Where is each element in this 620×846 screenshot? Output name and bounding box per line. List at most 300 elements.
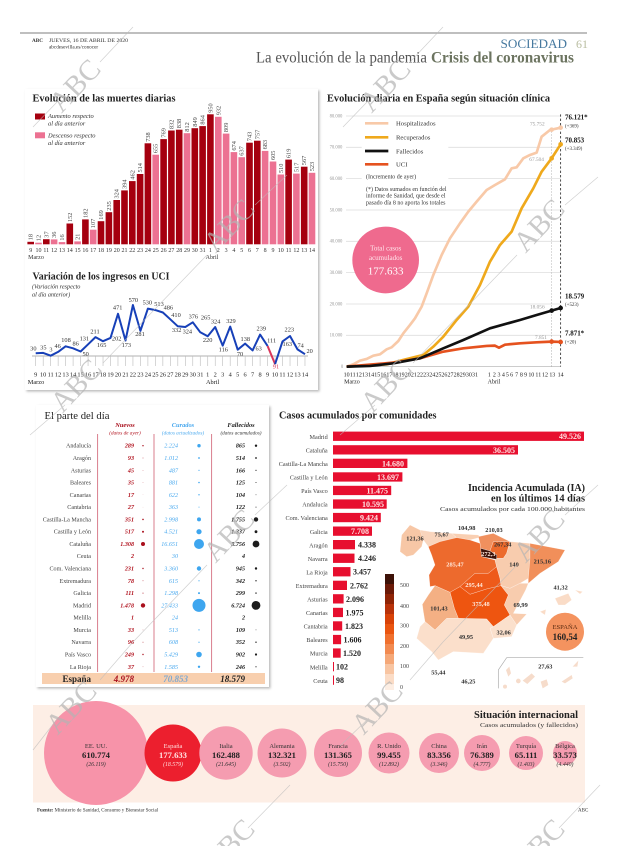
region names: Canarias	[70, 493, 92, 499]
legend: clinical situation: UCI	[396, 162, 407, 169]
panel: international situation	[33, 701, 585, 805]
line chart: ICU admissions: 410	[171, 312, 181, 319]
bar chart: daily deaths: 849	[192, 117, 199, 127]
x axis: dates of daily deaths: 3	[225, 248, 228, 254]
line chart: ICU admissions: 3	[49, 346, 53, 353]
column: deaths: 865	[236, 444, 245, 450]
masthead: ABC and date: JUEVES, 16 DE ABRIL DE 2020	[49, 38, 128, 44]
bubble: Italy	[199, 726, 253, 780]
heading: clinical situation: Evolución diaria en España según situación clínica	[327, 94, 551, 105]
panel: cases by community	[279, 410, 584, 685]
column: new cases: 289	[124, 444, 134, 450]
bar chart: cases by community: Extremadura	[296, 583, 328, 590]
column: recovered: 615	[169, 579, 178, 585]
region names: Baleares	[70, 480, 92, 486]
right-hand totals: (+523)	[565, 303, 579, 308]
bar chart: cases by community: Melilla	[310, 664, 328, 671]
column: recovered: 608	[169, 640, 178, 646]
x axis: dates of clinical chart: 9	[524, 373, 527, 379]
x axis: dates of daily deaths: 5	[240, 248, 243, 254]
bar chart: daily deaths: 18	[28, 234, 35, 240]
map value labels: 27,63	[538, 663, 552, 670]
legend: colour scale: 200	[400, 644, 409, 650]
axis values: 30.000	[330, 271, 343, 276]
bubble: UK	[368, 732, 410, 774]
x axis: dates of ICU admissions: 20	[115, 371, 121, 378]
x axis: dates of ICU admissions: 19	[107, 371, 114, 378]
column: new cases: 37	[127, 665, 135, 671]
x axis: dates of daily deaths: 10	[278, 248, 284, 254]
column: deaths: 3.756	[230, 542, 246, 548]
x axis: dates of daily deaths: 2	[217, 248, 220, 254]
line chart: ICU admissions: 281	[135, 331, 145, 338]
panel: daily deaths and ICU variation	[25, 89, 318, 390]
bar chart: daily deaths: 605	[270, 151, 277, 160]
bar chart: cases by community: 3.457	[353, 568, 371, 577]
bubble: Iran: 76.389	[470, 750, 494, 760]
callout: total cases: acumulados	[369, 254, 403, 262]
column: new cases: 45	[127, 468, 134, 474]
line chart: ICU admissions: 116	[219, 346, 228, 353]
column headers	[109, 422, 262, 436]
heading: international situation: Casos acumulados (y fallecidos)	[480, 722, 578, 729]
column: new cases: 78	[128, 579, 134, 585]
column: new cases: 1.478	[120, 603, 134, 609]
totals row: Spain: 4.978	[113, 674, 134, 684]
watermarks: ABC	[43, 53, 107, 119]
bubble: Italy: 162.488	[212, 750, 241, 760]
x axis: dates of ICU admissions: 12	[287, 371, 293, 378]
x axis: dates of daily deaths: 28	[176, 248, 182, 254]
bubble: France: (15.750)	[328, 761, 348, 768]
map value labels: 295,44	[465, 582, 484, 589]
header	[20, 33, 588, 67]
x axis: dates of ICU admissions: 9	[266, 371, 269, 378]
x axis: dates of daily deaths	[28, 248, 315, 261]
x axis: dates of clinical chart: 6	[510, 373, 513, 379]
legend: daily deaths: Descenso respecto	[47, 132, 96, 140]
column: recovered: 1.585	[164, 665, 178, 671]
axis values	[330, 114, 344, 370]
bar chart: daily deaths: 517	[293, 163, 300, 172]
column: new cases: 249	[124, 652, 134, 658]
map value labels: 41,32	[554, 584, 568, 591]
heading: incidence: Incidencia Acumulada (IA)	[468, 483, 585, 494]
x axis: dates of daily deaths: 16	[82, 248, 88, 254]
bar chart: cases by community: Galicia	[310, 529, 328, 536]
region names: Castilla y León	[54, 530, 91, 536]
bar chart: daily deaths: 235	[106, 201, 113, 211]
x axis: dates of clinical chart: 14	[368, 373, 374, 379]
line chart: ICU admissions: 223	[285, 326, 294, 333]
x axis: dates of clinical chart: 8	[520, 373, 523, 379]
x axis: dates of ICU admissions: 8	[258, 371, 262, 378]
x axis: dates of clinical chart: 3	[497, 373, 500, 379]
region names: Asturias	[71, 468, 92, 474]
bubble: USA: (26.119)	[86, 761, 106, 768]
bar chart: cases by community: 4.246	[358, 554, 376, 563]
legend: clinical situation: Recuperados	[396, 135, 431, 142]
map value labels: 267,34	[494, 542, 512, 549]
column: new cases: 231	[124, 566, 134, 572]
x axis: dates of daily deaths: 22	[129, 248, 135, 254]
column: recovered: 513	[169, 628, 178, 634]
line chart: ICU admissions	[28, 297, 313, 386]
x axis: dates of clinical chart: 24	[429, 373, 435, 379]
x axis: dates of ICU admissions: 13	[294, 371, 301, 378]
x axis: dates of clinical chart: 19	[399, 373, 405, 379]
x axis: dates of clinical chart: 16	[380, 373, 386, 379]
x axis: dates of ICU admissions: 10	[272, 371, 278, 378]
note: ICU admissions: al día anterior)	[32, 291, 70, 298]
column headers: Nuevos	[114, 422, 135, 429]
region names: País Vasco	[65, 652, 91, 658]
line chart: ICU admissions: 513	[154, 301, 164, 308]
line chart: ICU admissions: 35	[40, 344, 46, 351]
column: deaths: 246	[235, 665, 246, 671]
bar chart: cases by community: 36.505	[493, 446, 515, 455]
x axis: dates of clinical chart: 22	[417, 373, 423, 379]
grey previous-day values: 18.056	[530, 304, 545, 310]
bar chart: daily deaths: 738	[145, 132, 152, 142]
map value labels: 32,06	[497, 630, 511, 637]
totals row: Spain: 18.579	[220, 674, 246, 684]
bar chart: daily deaths: 864	[200, 114, 207, 125]
x axis: dates of ICU admissions: 24	[145, 371, 152, 378]
x axis: dates of ICU admissions: Abril	[206, 379, 220, 386]
x axis: dates of daily deaths: 19	[106, 248, 112, 254]
legend: colour scale: 300	[400, 624, 409, 630]
bar chart: daily deaths	[27, 103, 316, 261]
x axis: dates of ICU admissions: 14	[70, 371, 77, 378]
x axis: dates of daily deaths: 12	[293, 248, 299, 254]
bar chart: cases by community: 2.762	[350, 581, 368, 590]
bar chart: daily deaths: 12	[36, 235, 42, 241]
map value labels: 375,48	[472, 601, 490, 608]
bar chart: cases by community: 7.708	[351, 527, 369, 536]
line: deaths	[347, 308, 561, 367]
line chart: ICU admissions: 211	[90, 329, 100, 336]
legend: clinical situation: pasado día 8 no aporta los totales	[366, 200, 446, 206]
bar chart: cases by community: 1.975	[346, 608, 364, 617]
line chart: ICU admissions: 471	[113, 305, 122, 312]
column: new cases: 1.308	[120, 542, 134, 548]
bar chart: daily deaths: 757	[254, 130, 261, 139]
panel: cumulative incidence map	[385, 483, 585, 691]
region names: Aragón	[73, 456, 91, 462]
line: ICU	[347, 342, 561, 367]
source line: ABC	[578, 808, 589, 814]
region names: Cantabria	[67, 505, 91, 511]
x axis: dates of daily deaths: 31	[200, 248, 206, 254]
legend: colour scale	[385, 574, 409, 691]
x axis: dates of ICU admissions: 25	[152, 371, 159, 378]
column: new cases: 111	[126, 591, 134, 597]
column: recovered: 1.012	[164, 456, 178, 462]
x axis: dates of daily deaths: 6	[248, 248, 251, 254]
column: new cases: 351	[124, 517, 134, 523]
legend: clinical situation	[365, 121, 447, 206]
column headers: Fallecidos	[227, 422, 255, 429]
line chart: ICU admissions: 202	[112, 335, 121, 342]
x axis: dates of daily deaths: 11	[43, 248, 49, 254]
map value labels: 104,98	[458, 525, 475, 532]
x axis: dates of clinical chart: 25	[435, 373, 441, 379]
legend: clinical situation: Hospitalizados	[396, 121, 436, 128]
column: deaths: 902	[236, 652, 245, 658]
line chart: ICU admissions: 265	[201, 314, 210, 321]
line chart: ICU admissions: 46	[54, 343, 61, 350]
column: deaths: 6.724	[231, 603, 245, 609]
bubble: China: (3.346)	[431, 761, 448, 768]
region names: Extremadura	[60, 579, 91, 585]
bar chart: cases by community: 2.096	[346, 595, 364, 604]
bar chart: cases by community: Ceuta	[313, 678, 328, 685]
x axis: dates of clinical chart	[344, 373, 564, 385]
bar chart: cases by community: Aragón	[309, 542, 328, 549]
x axis: dates of ICU admissions	[28, 371, 309, 386]
column: deaths: 4	[241, 554, 245, 560]
bubble: Italy: (21.645)	[216, 761, 236, 768]
bubble: USA: 610.774	[82, 750, 111, 760]
x axis: dates of ICU admissions: 9	[34, 371, 37, 378]
column: recovered: 16.651	[161, 542, 178, 548]
column: deaths: 2	[241, 616, 245, 622]
heading: daily report: El parte del día	[44, 411, 110, 422]
x axis: dates of daily deaths: 7	[256, 248, 259, 254]
x axis: dates of daily deaths: 4	[232, 248, 235, 254]
column: new cases: 35	[127, 480, 134, 486]
bar chart: cases by community	[279, 432, 584, 685]
column headers: (datos acumulados)	[220, 430, 262, 436]
bar chart: cases by community: 13.697	[377, 473, 399, 482]
x axis: dates of ICU admissions: 3	[221, 371, 224, 378]
column: new cases: 1	[131, 616, 134, 622]
x axis: dates of ICU admissions: 30	[190, 371, 196, 378]
line chart: ICU admissions: 74	[297, 342, 305, 349]
x axis: dates of ICU admissions: 26	[160, 371, 166, 378]
bar chart: cases by community: 14.680	[382, 459, 404, 468]
x axis: dates of ICU admissions: 15	[77, 371, 84, 378]
axis values: 20.000	[330, 302, 343, 307]
line chart: ICU admissions: 570	[129, 297, 138, 304]
x axis: dates of ICU admissions: 18	[100, 371, 106, 378]
right-hand totals	[565, 113, 588, 345]
x axis: dates of ICU admissions: 16	[85, 371, 91, 378]
bar chart: daily deaths: 152	[67, 213, 74, 222]
bar chart: cases by community: 1.606	[344, 636, 362, 644]
column: recovered: 30	[171, 554, 178, 560]
line chart: ICU admissions: 376	[189, 314, 198, 321]
bubble: USA: EE. UU.	[85, 743, 107, 750]
bubble: UK: 99.455	[377, 750, 401, 760]
map value labels: 210,03	[485, 527, 503, 534]
x axis: dates of ICU admissions: 11	[48, 371, 54, 378]
column: new cases: 33	[127, 628, 134, 634]
x axis: dates of clinical chart: 26	[441, 373, 447, 379]
x axis: dates of clinical chart: 13	[362, 373, 368, 379]
column: deaths: 125	[236, 480, 245, 486]
bar chart: daily deaths: 567	[301, 156, 308, 165]
axis values: 10.000	[330, 334, 343, 339]
section name and page number: SOCIEDAD	[500, 37, 567, 51]
x axis: dates of clinical chart: 4	[502, 373, 505, 379]
x axis: dates of ICU admissions: 31	[197, 371, 203, 378]
x axis: dates of ICU admissions: 12	[55, 371, 61, 378]
callout: Spain incidence: 160,54	[553, 632, 578, 642]
line chart: ICU admissions: 111	[267, 338, 276, 345]
map value labels: 101,43	[430, 606, 448, 613]
section name and page number: 61	[576, 37, 588, 51]
x axis: dates of clinical chart: 31	[472, 373, 478, 379]
line chart: ICU admissions: 91	[273, 364, 279, 371]
bar chart: daily deaths: 683	[262, 140, 269, 149]
bar chart: cases by community: Madrid	[309, 434, 329, 441]
x axis: dates of ICU admissions: 11	[279, 371, 286, 378]
line chart: ICU admissions: 329	[226, 318, 236, 325]
column: deaths: 945	[236, 566, 245, 572]
bar chart: daily deaths: 169	[98, 210, 105, 220]
column: recovered: 363	[168, 505, 178, 511]
column: new cases	[120, 444, 145, 671]
right-hand totals: 7.871*	[565, 330, 585, 338]
watermarks: ABC	[44, 353, 108, 419]
x axis: dates of ICU admissions: 6	[243, 371, 247, 378]
x axis: dates of clinical chart: 28	[454, 373, 460, 379]
right-hand totals: (+3.349)	[565, 147, 583, 152]
x axis: dates of daily deaths: 12	[51, 248, 57, 254]
note: ICU admissions	[32, 283, 80, 298]
legend: daily deaths	[35, 113, 96, 147]
x axis: dates of clinical chart: 7	[515, 373, 518, 379]
x axis: dates of daily deaths: 26	[161, 248, 167, 254]
region names: Cataluña	[69, 542, 91, 548]
region names	[43, 444, 92, 671]
column: recovered: 2.224	[164, 444, 178, 450]
masthead: ABC and date: ABC	[32, 38, 43, 44]
map value labels: 215,16	[534, 559, 551, 566]
x axis: dates of daily deaths: 1	[209, 248, 212, 254]
bubble: Belgium	[553, 741, 577, 768]
bar chart: daily deaths: 107	[90, 219, 97, 228]
grey previous-day values: 7.851	[535, 335, 547, 341]
column: new cases: 93	[128, 456, 134, 462]
line chart: ICU admissions: 138	[241, 336, 250, 343]
x axis: dates of daily deaths: 9	[272, 248, 274, 254]
map value labels: 285,47	[446, 562, 465, 569]
axis values: 60.000	[330, 177, 343, 182]
column: deaths: 122	[236, 505, 245, 511]
legend: colour scale: 100	[400, 664, 409, 670]
bubble: China	[419, 733, 459, 773]
bar chart: daily deaths: 769	[161, 128, 168, 138]
bubble: Belgium: 33.573	[553, 750, 577, 760]
line chart: ICU admissions: 324	[183, 329, 193, 336]
column: recovered: 2.998	[164, 517, 178, 523]
bar chart: cases by community: La Rioja	[306, 569, 328, 576]
x axis: dates of daily deaths: 25	[153, 248, 159, 254]
heading: international situation: Situación internacional	[474, 710, 578, 721]
column: recovered: 3.360	[163, 566, 178, 572]
bar chart: cases by community: Castilla y León	[290, 475, 328, 482]
x axis: dates of clinical chart: 30	[466, 373, 472, 379]
right-hand totals: (+20)	[565, 340, 576, 345]
column: new cases: 17	[128, 493, 135, 499]
source line: Fuente: Ministerio de Sanidad, Consumo y Bienestar Social	[37, 808, 159, 814]
map value labels: 75,67	[435, 532, 450, 539]
map value labels	[406, 525, 568, 685]
x axis: dates of ICU admissions: Marzo	[28, 379, 44, 386]
watermarks: ABC	[345, 675, 409, 741]
line chart: ICU admissions: 63	[255, 346, 262, 353]
line: recovered	[347, 144, 561, 367]
x axis: dates of ICU admissions: 4	[229, 371, 233, 378]
x axis: dates of ICU admissions: 2	[214, 371, 217, 378]
bar chart: cases by community: 1.823	[345, 622, 363, 631]
x axis: dates of clinical chart: 10	[344, 373, 350, 379]
x axis: dates of daily deaths: 24	[145, 248, 151, 254]
bar chart: daily deaths: 674	[231, 140, 238, 151]
panel: clinical situation in Spain	[327, 94, 588, 385]
x axis: dates of daily deaths: 10	[36, 248, 42, 254]
totals row: Spain	[42, 673, 265, 684]
x axis: dates of ICU admissions: 7	[251, 371, 254, 378]
grey previous-day values	[529, 122, 547, 341]
watermarks: ABC	[197, 503, 261, 569]
x axis: dates of daily deaths: 15	[75, 248, 81, 254]
watermarks: ABC	[354, 353, 418, 419]
line chart: ICU admissions: 332	[172, 327, 181, 334]
heading: incidence: en los últimos 14 días	[491, 494, 585, 504]
x axis: dates of clinical chart: 10	[528, 373, 534, 379]
masthead: ABC and date	[32, 38, 128, 50]
bubble: Spain: 177.633	[159, 750, 187, 760]
bar chart: cases by community: 11.475	[366, 486, 388, 495]
bar chart: cases by community: Murcia	[310, 651, 328, 658]
line chart: ICU admissions: 30	[30, 345, 36, 352]
x axis: dates of ICU admissions: 21	[122, 371, 129, 378]
legend: colour scale: 400	[400, 604, 409, 610]
map value labels: 49,95	[459, 634, 473, 641]
watermarks: ABC	[197, 193, 261, 259]
x axis: dates of clinical chart: 17	[386, 373, 392, 379]
line chart: ICU admissions: 163	[283, 341, 292, 348]
bubble: Spain: (18.579)	[163, 761, 183, 768]
bar chart: daily deaths: 16	[59, 234, 66, 241]
x axis: dates of clinical chart: 5	[506, 373, 509, 379]
right-hand totals: 76.121*	[565, 113, 588, 121]
bubble: Germany	[258, 728, 306, 778]
x axis: dates of clinical chart: 18	[393, 373, 399, 379]
watermarks: ABC	[39, 675, 103, 741]
map value labels: 121,36	[406, 536, 424, 543]
callout: Spain incidence	[546, 613, 584, 651]
bar chart: cases by community: 4.338	[358, 541, 376, 550]
x axis: dates of daily deaths: 23	[137, 248, 143, 254]
x axis: dates of clinical chart: 13	[549, 373, 555, 379]
line chart: clinical situation	[330, 113, 588, 385]
x axis: dates of clinical chart: 1	[488, 373, 491, 379]
callout: Spain incidence: ESPAÑA	[552, 623, 578, 631]
bar chart: daily deaths: 932	[215, 106, 222, 115]
headline	[256, 50, 574, 67]
panel: daily report table	[36, 405, 269, 687]
x axis: dates of clinical chart: 15	[374, 373, 380, 379]
bar chart: daily deaths: 462	[129, 170, 136, 180]
bubble: Germany: (3.502)	[274, 761, 291, 768]
axis values: 0	[341, 365, 344, 370]
line: hospitalised	[347, 128, 561, 367]
